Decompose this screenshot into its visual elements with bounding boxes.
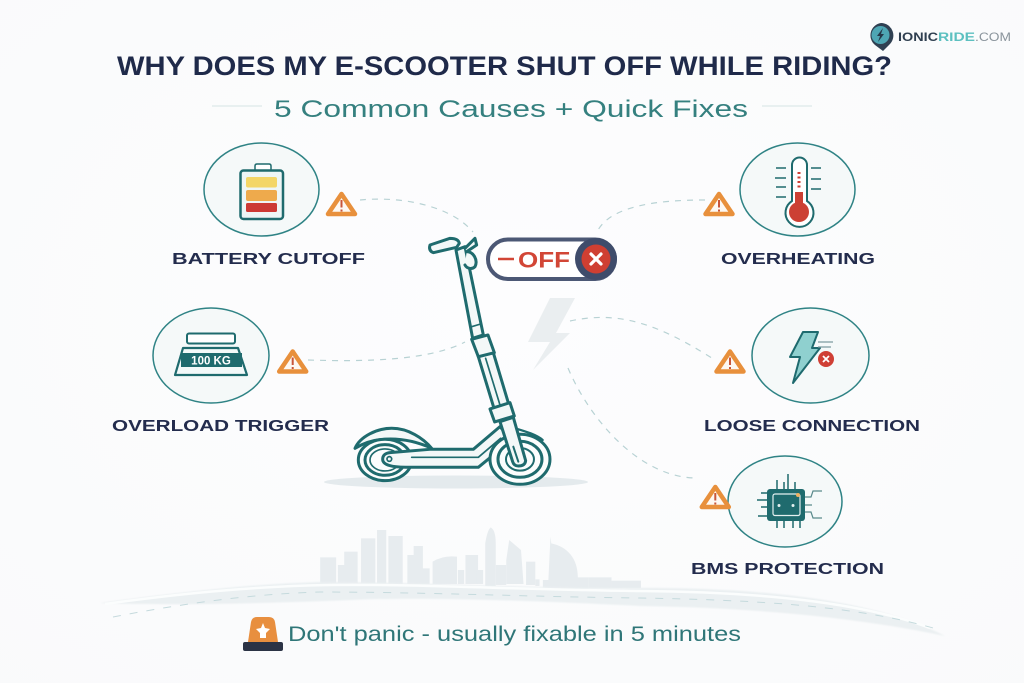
- brake lever: [465, 238, 477, 268]
- upper stem: [456, 247, 483, 338]
- lower collar: [490, 403, 514, 422]
- road: [100, 582, 945, 636]
- bms icon circle: [728, 456, 842, 547]
- panel: battery cutoff: [172, 143, 365, 268]
- city skyline: [320, 527, 641, 588]
- warning icon: [702, 487, 729, 507]
- icon: faint lightning bolt: [528, 298, 575, 370]
- panel: bms protection: [691, 456, 884, 578]
- ground shadow: [324, 476, 588, 488]
- icon: thermometer: [775, 158, 821, 227]
- rear wheel: [358, 439, 412, 481]
- battery icon circle: [204, 143, 319, 236]
- logo: IonicRide.com: .COM: [975, 30, 1011, 44]
- icon: battery: [240, 164, 283, 219]
- front fender: [515, 428, 543, 440]
- rear fender: [355, 428, 432, 448]
- warning icon: [328, 194, 355, 214]
- title: WHY DOES MY E-SCOOTER SHUT OFF WHILE RIDING?: [117, 51, 892, 81]
- front wheel: [490, 434, 550, 484]
- label: overheating: OVERHEATING: [721, 251, 875, 268]
- logo: IonicRide.com: IONIC: [898, 30, 938, 44]
- label: battery cutoff: BATTERY CUTOFF: [172, 251, 365, 268]
- icon: scale 100 kg: 100 KG: [191, 356, 231, 368]
- warning icon: [716, 352, 744, 372]
- upper collar: [472, 335, 494, 357]
- panel: loose connection: [704, 308, 920, 435]
- off switch badge: OFF: [518, 248, 570, 272]
- logo: IonicRide.com: [870, 23, 1011, 51]
- panel: overload trigger: [112, 308, 330, 435]
- fork: [500, 417, 526, 466]
- icon: alert beacon: [243, 617, 283, 651]
- scooter illustration: [355, 238, 550, 484]
- icon: chip: [757, 474, 822, 528]
- warning icon: [279, 352, 306, 372]
- subtitle: 5 Common Causes + Quick Fixes: [274, 96, 748, 123]
- handlebar grip: [430, 238, 459, 253]
- dashed connectors: [308, 199, 715, 478]
- deck: [383, 427, 512, 467]
- logo: IonicRide.com: RIDE: [938, 30, 975, 44]
- warning icon: [706, 194, 732, 214]
- overload icon circle: [153, 308, 269, 403]
- overheating icon circle: [740, 143, 855, 236]
- panel: overheating: [706, 143, 875, 268]
- label: overload trigger: OVERLOAD TRIGGER: [112, 418, 330, 435]
- label: bms protection: BMS PROTECTION: [691, 561, 884, 578]
- icon: scale 100 kg: [175, 334, 247, 375]
- footer message: Don't panic - usually fixable in 5 minutes: [288, 623, 741, 646]
- lower stem: [478, 353, 509, 408]
- loose connection icon circle: [752, 308, 869, 403]
- label: loose connection: LOOSE CONNECTION: [704, 418, 920, 435]
- off switch badge: [488, 238, 617, 280]
- icon: bolt with x: [790, 332, 834, 383]
